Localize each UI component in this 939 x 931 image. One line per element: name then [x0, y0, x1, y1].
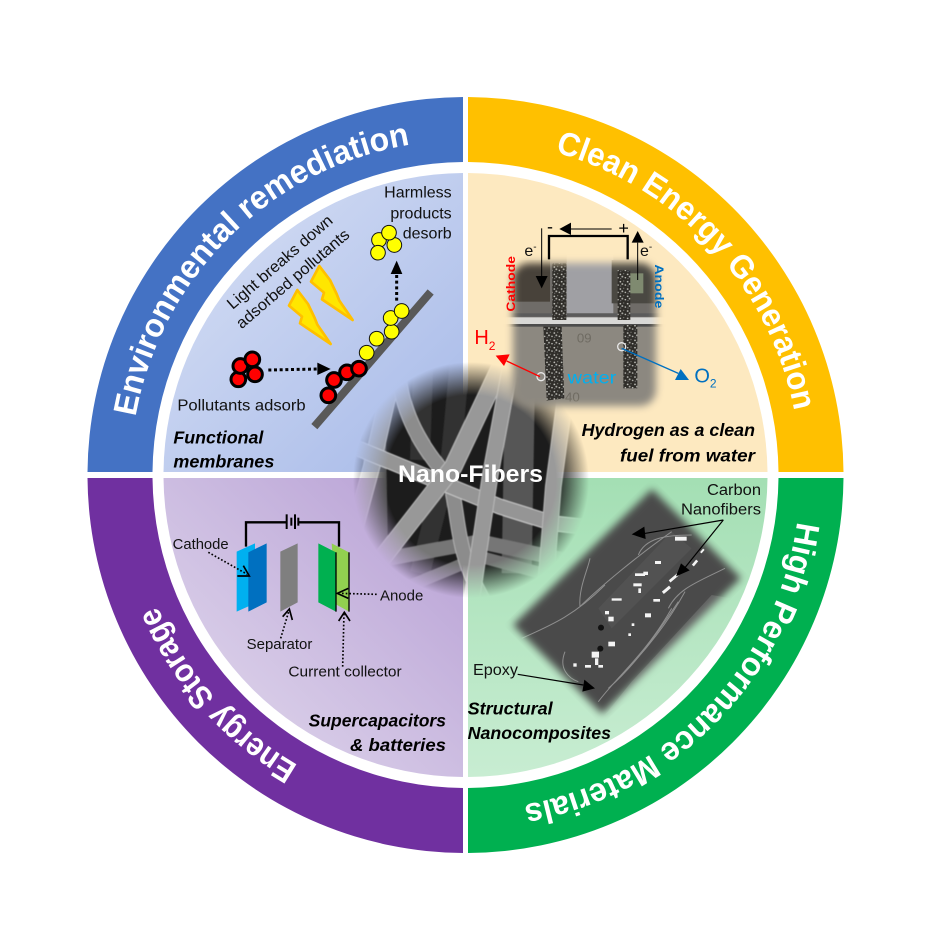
label: harmless products desorb: Harmless	[384, 185, 452, 202]
caption: hydrogen as a clean fuel from water: Hydrogen as a clean	[582, 420, 755, 440]
caption: structural nanocomposites	[468, 698, 611, 743]
battery part labels: Current collector	[288, 665, 402, 681]
label: O2: O	[694, 365, 710, 387]
panel: energy storage ring segment	[88, 478, 463, 853]
label: O2: 2	[710, 376, 717, 390]
battery part labels	[173, 537, 423, 681]
panel: high performance ring segment	[468, 478, 844, 853]
label: anode: Anode	[652, 264, 666, 309]
label: H2: H	[474, 327, 489, 349]
anode pointer	[337, 588, 377, 598]
battery part labels: Cathode	[173, 537, 229, 553]
electron labels: -	[649, 242, 652, 253]
caption: supercapacitors and batteries: Supercapacitors	[309, 711, 446, 731]
group: structural nanocomposites	[468, 478, 761, 743]
caption: structural nanocomposites: Nanocomposites	[468, 723, 611, 743]
separator pointer	[281, 609, 292, 638]
electrode photograph	[506, 257, 662, 412]
label: cathode: Cathode	[504, 256, 518, 312]
label: light breaks down: Light breaks down	[224, 212, 336, 313]
label: light breaks down: adsorbed pollutants	[233, 226, 353, 332]
arrow: hydrogen	[496, 354, 540, 377]
electron labels: -	[533, 242, 537, 253]
icon: lightning bolts	[289, 266, 353, 344]
label: pollutants adsorb: Pollutants adsorb	[177, 398, 306, 415]
icon: battery symbol	[287, 514, 298, 529]
electrode photograph: 60	[577, 330, 592, 345]
electrode photograph: 40	[565, 390, 580, 405]
caption: structural nanocomposites: Structural	[468, 698, 554, 718]
caption: supercapacitors and batteries	[309, 711, 446, 755]
polarity signs: -	[547, 217, 553, 237]
label: epoxy: Epoxy	[473, 662, 518, 679]
heading: Environmental remediation: Environmental remediation	[114, 128, 408, 415]
caption: functional membranes: Functional	[173, 427, 265, 447]
panel: hydrogen background	[468, 173, 768, 472]
pointer: carbon nanofibers lower	[676, 520, 723, 576]
label: harmless products desorb: products	[390, 205, 452, 222]
label: carbon nanofibers: Nanofibers	[681, 501, 761, 518]
polarity signs: +	[618, 218, 629, 238]
electron arrow left	[536, 228, 548, 288]
label: H2: 2	[489, 339, 496, 353]
heading: Clean Energy Generation: Clean Energy Generation	[558, 132, 810, 409]
title: Nano-Fibers: Nano-Fibers	[398, 461, 543, 488]
current collector pointer	[339, 612, 350, 667]
separator plate	[280, 543, 298, 612]
arrow: oxygen	[622, 348, 689, 380]
panel: supercapacitors background	[164, 478, 463, 777]
central nano-fiber micrograph	[354, 363, 588, 596]
anode plates	[318, 543, 349, 612]
battery part labels: Anode	[380, 589, 423, 605]
circuit wire	[549, 236, 628, 259]
panel: functional membranes background	[164, 173, 463, 472]
infographic: nano-fibers application wheel	[88, 97, 844, 853]
electron labels	[524, 242, 652, 260]
caption: functional membranes: membranes	[173, 451, 275, 471]
caption: functional membranes	[173, 427, 275, 471]
group: hydrogen electrolysis diagram	[474, 217, 756, 466]
label: harmless products desorb: desorb	[403, 225, 452, 242]
electron arrow right	[632, 231, 644, 280]
group: supercapacitor diagram	[173, 514, 446, 755]
desorbed yellow cluster	[371, 225, 402, 260]
pointer: carbon nanofibers upper	[632, 520, 723, 539]
electron labels: e	[524, 243, 533, 260]
electron arrow top	[559, 223, 612, 235]
caption: supercapacitors and batteries: & batteries	[350, 735, 446, 755]
pollutant red cluster	[231, 352, 262, 387]
battery part labels: Separator	[247, 637, 312, 653]
adsorbed red particles	[321, 361, 366, 403]
pointer: epoxy	[518, 674, 595, 692]
adsorbed yellow particles	[359, 304, 409, 360]
label: carbon nanofibers: Carbon	[707, 482, 761, 499]
cathode plates	[237, 543, 267, 612]
caption: hydrogen as a clean fuel from water	[582, 420, 756, 466]
electron labels: e	[640, 243, 649, 260]
dotted arrow: adsorption	[268, 363, 331, 375]
polarity signs	[547, 217, 629, 238]
panel: environmental remediation ring segment	[88, 97, 463, 472]
panel: nanocomposites background	[468, 478, 768, 777]
cathode pointer	[208, 552, 249, 576]
caption: hydrogen as a clean fuel from water: fuel from water	[620, 446, 756, 466]
heading: Energy Storage: Energy Storage	[144, 609, 296, 784]
dotted arrow: desorption	[391, 261, 402, 301]
circuit wires	[246, 522, 339, 547]
label: harmless products desorb	[384, 185, 452, 242]
membrane bar	[314, 292, 431, 427]
panel: clean energy ring segment	[468, 97, 844, 472]
label: carbon nanofibers	[681, 482, 761, 518]
group: functional membranes diagram	[173, 185, 452, 471]
label: water: water	[567, 367, 616, 387]
SEM micrograph	[509, 485, 745, 718]
heading: High Performance Materials: High Performance Materials	[526, 524, 820, 824]
